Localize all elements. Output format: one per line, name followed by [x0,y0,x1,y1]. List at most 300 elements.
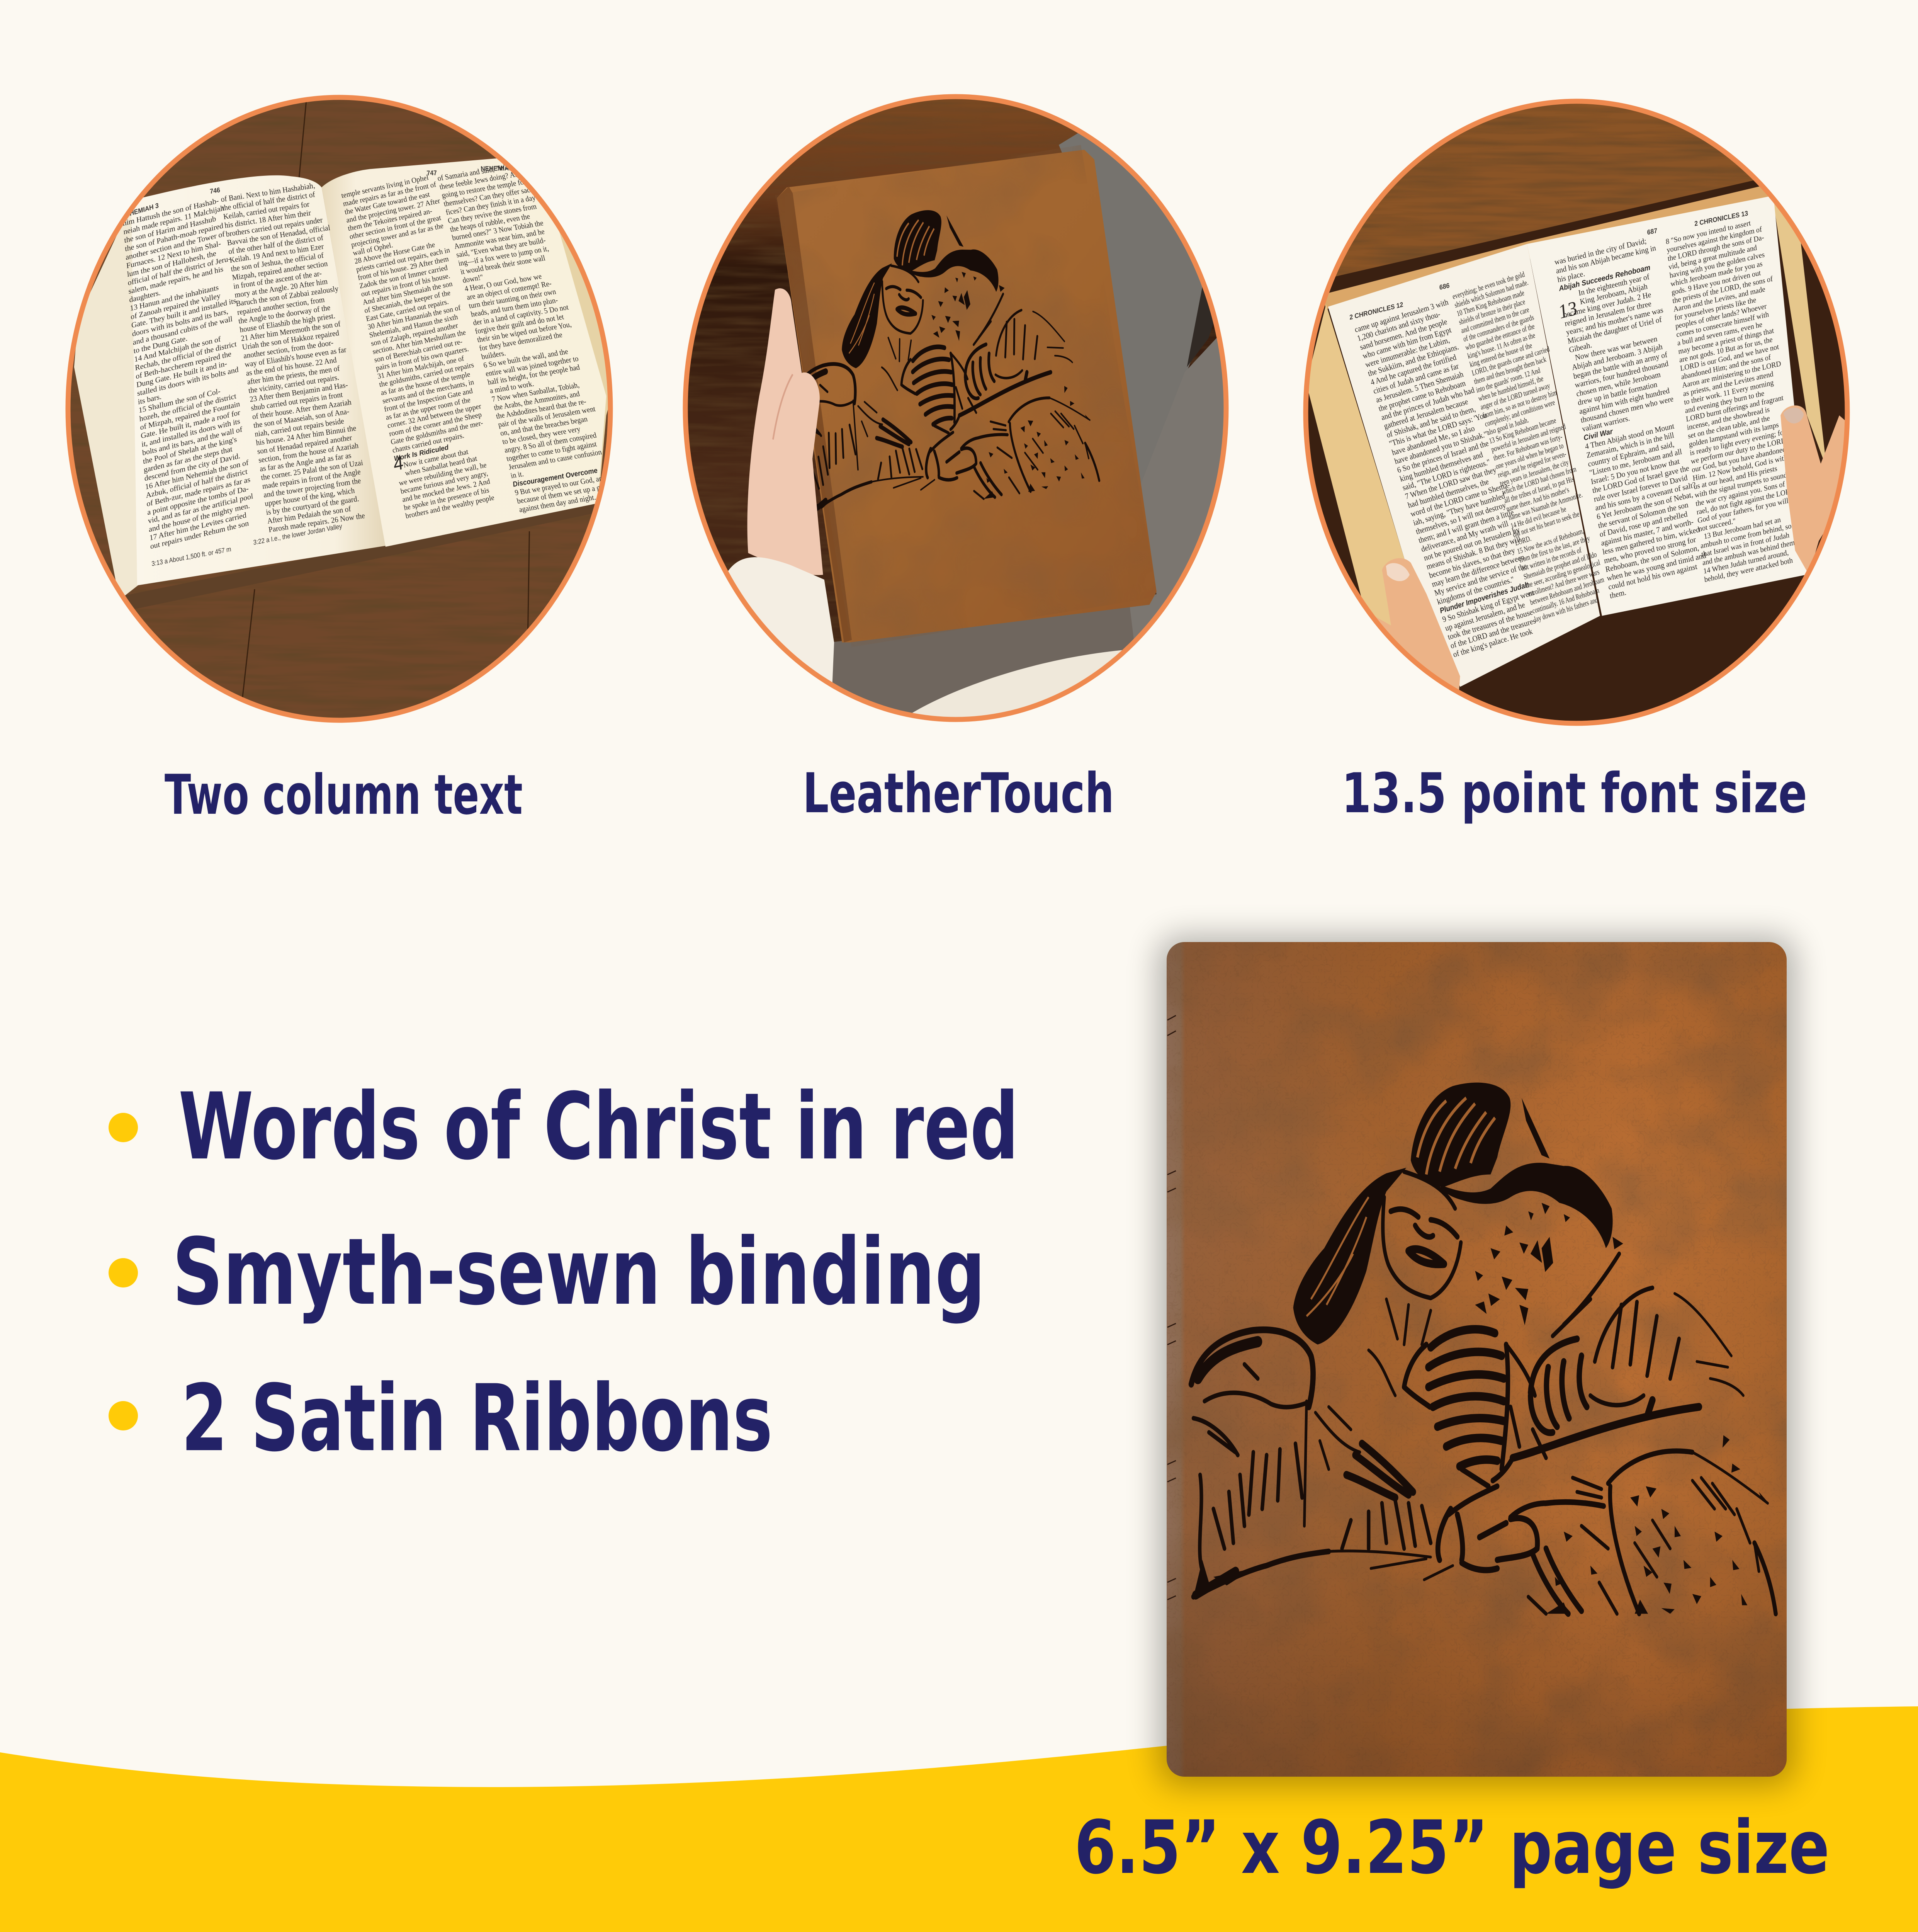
hands holding open bible: King Jeroboam, Abijah [1579,282,1648,306]
hands holding open bible [1298,92,1858,734]
open bible on wood table: section. After him Meshullam the [372,328,467,356]
hands holding open bible: reign, and he reigned for seven- [1497,449,1567,480]
hands holding open bible: Aaron are ministering to the LORD [1682,359,1782,390]
open bible on wood table: the heaps of rubble, even the [449,212,531,234]
hands holding open bible: 6 So the princes of Israel and the [1396,439,1490,475]
open bible on wood table: and the tower projecting from the [263,477,362,500]
hands holding open bible: "Listen to me, Jeroboam and all [1589,447,1683,478]
hands holding open bible: 686 [1439,282,1450,291]
open bible on wood table: 14 And Malchijah the son of [134,335,221,364]
hands holding open bible: king humbled themselves and [1399,450,1484,484]
open bible on wood table: his district. 18 After him their [224,209,312,230]
hands holding open bible: and evening they burn to the [1685,389,1765,415]
open bible on wood table: his house. 24 After him Binnui the [255,424,357,447]
open bible on wood table: on, and that the breaches began [499,415,589,438]
hands holding open bible: LORD, the guards came and carried [1471,344,1551,378]
open bible on wood table: Uriah the son of Hakkoz repaired [242,329,340,352]
hands holding open bible: the seer, according to genealogical [1525,558,1601,590]
open bible on wood table: forgive their guilt and do not let [474,313,565,336]
hands holding open bible: the LORD through the sons of Da- [1667,233,1765,263]
open bible on wood table: corner. 32 And between the upper [387,402,482,430]
open bible on wood table: repaired another section, from [237,296,325,317]
open bible on wood table: it, and installed its doors with its [141,417,241,449]
hands holding open bible: Rehoboam, the son of Solomon, [1605,544,1700,574]
open bible on wood table: a mind to work. [489,380,535,395]
bullet text 3: 2 Satin Ribbons [181,1365,773,1472]
hands holding open bible: 8 "So now you intend to assert [1665,219,1752,246]
open bible on wood table: pair of the walls of Jerusalem went [497,405,596,429]
open bible on wood table: 4 Hear, O our God, how we [464,272,542,293]
open bible on wood table: daughters. [129,288,161,304]
hands holding open bible: everything; he even took the gold [1451,270,1526,301]
open bible on wood table: Ammonite was near him, and he [453,228,545,251]
open bible on wood table: niah, carried out repairs beside [254,417,345,439]
open bible on wood table: the son of Harim and Hasshub [124,214,216,245]
open bible on wood table: Parosh made repairs. 26 Now the [268,512,365,534]
open bible on wood table: Keilah, carried out repairs for [223,200,310,221]
open bible on wood table: to be closed, they were very [501,425,581,446]
hands holding open bible: the war cry against you. Sons of Is- [1695,478,1794,508]
bullet dot 3 [109,1401,138,1430]
open bible on wood table: the Water Gate toward the east [344,190,431,216]
open bible on wood table: 17 After him the Levites carried [149,511,247,543]
open bible on wood table: shub carried out repairs in front [250,391,343,413]
open bible on wood table: 21 After him Meremoth the son of [240,320,341,343]
open bible on wood table: the son of Jeshua, the official of [230,251,324,274]
open bible on wood table: And after him Shemaiah the son [362,280,454,307]
open bible on wood table: them the Tekoites repaired an- [347,207,433,233]
open bible on wood table: 15 Shallum the son of Col- [138,387,221,415]
hands holding open bible: began the battle with an army of [1573,350,1668,381]
open bible on wood table: and he mocked the Jews. 2 And [401,477,491,504]
open bible on wood table: the son of Maaseiah, son of Ana- [253,407,350,430]
hands holding open bible: shields which Solomon had made. [1454,277,1529,310]
hands holding open bible: country of Ephraim, and said, [1587,440,1675,469]
open bible on wood table: der in a land of captivity. 5 Do not [472,303,570,327]
hands holding open bible: Now there was war between [1574,334,1658,362]
hands holding open bible: them and then brought them back [1473,354,1547,386]
hands holding open bible: completely; and conditions were [1484,398,1556,429]
photo circle: leathertouch [680,92,1240,730]
open bible on wood table: as the end of his house. 22 And [245,356,337,378]
open bible on wood table: entire wall was joined together to [485,354,579,378]
hands holding open bible: word of the LORD came to Shema- [1409,480,1511,519]
hands holding open bible: of the LORD and the treasures [1449,616,1537,650]
hands holding open bible: Israel: 5 Do you not know that [1590,457,1680,486]
hands holding open bible: 13 But Jeroboam had set an [1703,515,1781,541]
open bible on wood table: After him Pedaiah the son of [267,505,352,526]
orange ring [685,97,1226,719]
hands holding open bible: against him with eight hundred [1578,386,1670,416]
open bible on wood table: in front of the ascent of the ar- [233,269,322,291]
open bible on wood table: salem, made repairs, he and his [128,265,224,296]
hands holding open bible: name there. And his mother's [1505,485,1570,513]
hands holding open bible: have abandoned you to Shishak.'" [1393,429,1490,466]
leather cover [1167,942,1787,1777]
open bible on wood table: 7 Now when Sanballat, Tobiah, [491,381,580,404]
open bible on wood table: way of Eliashib's house even as far [244,345,347,369]
open bible on wood table: descend from the city of David. [144,452,241,483]
hands holding open bible: means of Shishak. 8 But they will [1425,534,1522,571]
yellow wave footer band [0,1706,1918,1932]
hands holding open bible: valiant warriors. [1582,414,1631,434]
open bible on wood table: 746 [210,186,220,195]
hands holding open bible: anger of the LORD turned away [1480,381,1551,412]
open bible on wood table: 747 [426,169,437,177]
open bible on wood table: son of Berechiah carried out re- [374,338,463,364]
open bible on wood table: Zadok the son of Immer carried [359,264,448,290]
hands holding open bible: and committed them to the care [1460,305,1530,335]
open bible on wood table: half its height, for the people had [487,363,581,387]
open bible on wood table: 13 Hanun and the inhabitants [130,283,219,313]
open bible on wood table: for they have demoralized the [478,331,563,353]
hands holding open bible: are not gods. 10 But as for us, the [1679,335,1773,364]
hands holding open bible: shields of bronze in their place [1458,297,1526,327]
open bible on wood table: turn their taunting on their own [468,287,557,310]
hands holding open bible: may learn the difference between [1430,553,1526,589]
open bible on wood table: when Sanballat heard that [404,454,478,478]
hands holding open bible: 4 Then Abijah stood on Mount [1584,422,1675,451]
open bible on wood table: upper house of the king, which [264,486,355,508]
open bible on wood table: burned ones?" 3 Now Tobiah the [451,219,544,242]
hands holding open bible: our God, but you have abandoned [1691,445,1786,474]
hands holding open bible: with the signal trumpets to sound [1694,471,1788,500]
open bible on wood table: 31 After him Malchijah, one of [377,354,465,381]
open bible on wood table: servants and of the merchants, in [382,378,475,405]
hands holding open bible: did not set his heart to seek the [1512,509,1580,539]
open bible on wood table: Jerusalem and to cause confusion [508,448,603,472]
hands holding open bible: up against Jerusalem, and he [1444,600,1526,633]
hands holding open bible: incense, and the showbread is [1687,405,1770,432]
open bible on wood table: as far as the Angle and as far as [259,451,352,473]
hands holding open bible: 1,200 chariots and sixty thou- [1356,310,1441,343]
open bible on wood table: fices? Can they finish it in a day? [445,193,540,217]
open bible on wood table: lum the son of Hallohesh, the [127,249,217,279]
hands holding open bible: them. [1609,588,1627,600]
hands holding open bible: My service and the service of the [1433,561,1528,598]
hands holding open bible: set on the clean table, and the [1687,414,1770,440]
hands holding open bible: Plunder Impoverishes Judah [1439,580,1530,615]
hands holding open bible: gathered at Jerusalem because [1383,397,1469,431]
open bible on wood table: Shelemiah, and Hanun the sixth [369,313,459,340]
hands holding open bible: continually. 16 And Rehoboam [1531,585,1600,615]
open bible on wood table: against them day and night. [518,493,597,514]
open bible on wood table: house of Eliashib the high priest. [239,312,336,334]
hands holding open bible: years; and his mother's name was [1565,306,1664,337]
engraved family portrait [1191,1083,1776,1614]
open bible on wood table: Dung Gate. He built it and in- [136,359,228,389]
hands holding open bible: and the ambush was behind them. [1702,538,1797,567]
open bible on wood table: angry. 8 So all of them conspired [503,431,598,455]
open bible on wood table: of Zanoah repaired the Valley [130,291,221,321]
hands holding open bible: of Shishak, and he said to them, [1385,405,1476,440]
hands holding open bible: king's house. 11 As often as the [1466,330,1536,361]
open bible on wood table: vid, and as far as the artificial pool [148,492,253,526]
hands holding open bible: 2 CHRONICLES 12 [1349,301,1403,321]
open bible on wood table: other section in front of the great [349,214,442,241]
hands holding open bible: we perform our duty to the LORD [1690,436,1787,466]
open bible on wood table: of Beth-zur, made repairs as far as [146,475,251,509]
hands holding open bible: one years old when he began to [1495,441,1565,471]
open bible on wood table: wall of Ophel. [352,241,394,257]
orange ring [68,97,610,720]
open bible on wood table: after him the priests, the men of [247,364,340,386]
open bible on wood table: Gate. He built it, made a roof for [141,408,241,440]
hands holding open bible: of David, rose up and rebelled [1599,510,1688,539]
open bible on wood table: Furnaces. 12 Next to him Shal- [126,239,221,270]
open bible on wood table: Rechab, the official of the district [135,340,237,372]
hands holding open bible: God of your fathers, for you will [1697,497,1789,525]
open bible on wood table: 23 After them Benjamin and Has- [249,381,348,404]
open bible on wood table: down!" [462,273,484,285]
hands holding open bible: from him, so as not to destroy him [1481,388,1558,420]
hands holding open bible: the prophet came to Rehoboam [1378,379,1467,413]
open bible on wood table: Bavvai the son of Henadad, official [227,224,331,247]
open bible on wood table: Baruch the son of Zabbai zealously [235,285,339,308]
open bible on wood table: official of half the district of Jeru- [127,254,231,287]
hands holding open bible: 13 So King Rehoboam became [1488,416,1557,446]
hands holding open bible: the LORD God of Israel gave the [1592,464,1690,495]
hands holding open bible: 2 CHRONICLES 13 [1694,209,1748,228]
caption: two column text: Two column text [165,763,523,827]
hands holding open bible: against his master, 7 and worth- [1600,517,1694,548]
hands holding open bible: lay down with his fathers and [1533,595,1599,624]
hands holding open bible: which Jeroboam made for you as [1670,260,1763,288]
hands holding open bible: is ready to light every evening; for [1689,428,1787,457]
open bible on wood table: builders. [481,349,506,361]
hands holding open bible: between Rehoboam and Jeroboam [1529,575,1605,607]
hands holding open bible: us at our head, and His priests [1693,464,1778,491]
open bible on wood table: NEHEMIAH 3 [121,201,159,220]
hands holding open bible: became king over Judah. 2 He [1563,290,1652,320]
open bible on wood table: pairs in front of his own quarters. [375,345,469,372]
hands holding open bible: and the princes of Judah who had [1380,386,1476,422]
hands holding open bible: 14 When Judah turned around, [1703,548,1789,576]
hands holding open bible: sand horsemen. And the people [1359,317,1448,352]
hands holding open bible: rael, do not fight against the LORD [1696,486,1796,517]
hands holding open bible: not succeed." [1698,517,1736,534]
bullet dot 2 [109,1258,138,1287]
hands holding open bible: took the treasures of the house [1447,608,1534,642]
hands holding open bible: 14 He did evil because he [1510,504,1567,530]
open bible on wood table: 28 Above the Horse Gate the [354,241,436,266]
hands holding open bible: "This is what the LORD says: 'You [1388,411,1488,449]
open bible on wood table: Now it came about that [403,447,469,469]
hands holding open bible: was buried in the city of David; [1554,236,1647,267]
open bible on wood table: heads, and turn them into plun- [470,296,559,319]
open bible on wood table: a point opposite the tombs of Da- [147,484,249,517]
hands holding open bible: have abandoned Me, so I also [1391,424,1476,457]
hands holding open bible: Aaron and the Levites, and made [1673,285,1766,314]
hands holding open bible: golden lampstand with its lamps [1689,421,1779,449]
open bible on wood table: made repairs as far as the front of [342,180,437,208]
hands holding open bible: and his son Abijah became king in [1555,243,1656,276]
hand holding engraved leather book [680,92,1240,730]
open bible on wood table: out repairs in front of his house. [360,272,451,299]
hands holding open bible: had humbled themselves, the [1407,477,1490,510]
open bible on wood table: mory at the Angle. 20 After him [234,277,328,299]
open bible on wood table: he spoke in the presence of his [403,486,490,512]
open bible on wood table: 16 After him Nehemiah the son of [145,458,249,492]
open bible on wood table: Work Is Ridiculed [393,443,450,463]
hands holding open bible: when he humbled himself, the [1477,374,1544,403]
hands holding open bible: which the LORD had chosen from [1501,464,1577,497]
hands holding open bible: of the king's palace. He took [1452,627,1534,659]
large engraved leather bible [1159,937,1794,1785]
hands holding open bible: came up against Jerusalem 3 with [1354,298,1449,334]
hands holding open bible: LORD. [1514,534,1532,547]
hands holding open bible: 10 Then King Rehoboam made [1456,288,1525,318]
bullet text 1: Words of Christ in red [178,1073,1019,1180]
bullet text 2: Smyth-sewn binding [172,1219,985,1326]
hands holding open bible: men, who proved too strong for [1603,535,1697,565]
hands holding open bible: the priests of the LORD, the sons of [1672,275,1774,305]
open bible on wood table: 3:13 a About 1,500 ft. or 457 m [151,546,231,568]
hands holding open bible: for yourselves priests like the [1674,296,1757,322]
open bible on wood table: made repairs in front of the Angle [262,468,361,491]
open bible on wood table: temple servants living in Ophel [341,173,429,200]
hands holding open bible: Him. 12 Now behold, God is with [1692,453,1788,483]
open bible on wood table: 9 But we prayed to our God, and [514,474,607,497]
hands holding open bible: 13 [1558,296,1578,323]
hands holding open bible: the Sukkiim, and the Ethiopians. [1367,342,1460,378]
hands holding open bible: his place. [1557,269,1585,284]
hands holding open bible: as Jerusalem. 5 Then Shemaiah [1375,370,1464,405]
hands holding open bible: Shemaiah the prophet and of Iddo [1522,549,1598,581]
hands holding open bible: who guarded the entrance of the [1464,321,1536,352]
book shadow [1159,937,1794,1785]
hands holding open bible: 4 And he captured the fortified [1369,353,1458,387]
hands holding open bible: name was Naamah the Ammonite. [1507,490,1583,522]
open bible on wood table: bolts and its bars, and the wall of [142,425,243,457]
hands holding open bible: abandoned Him; and the sons of [1681,353,1772,381]
open bible on wood table: as far as the house of the temple [380,370,471,397]
hands holding open bible: enrollment? And there were wars [1527,567,1600,598]
open bible on wood table: Keilah. 19 And next to him Ezer [229,242,324,265]
hands holding open bible: as priests, and the Levites attend [1683,370,1774,398]
hands holding open bible: them; and I will grant them a little [1417,508,1515,545]
open bible on wood table: priests carried out repairs, each in [355,246,451,274]
hands holding open bible: Zemaraim, which is in the hill [1586,431,1675,460]
hands holding open bible: rule over Israel forever to David [1593,473,1688,504]
hands holding open bible: not written in the records of [1520,545,1582,573]
hands holding open bible: yourselves against the kingdom of [1666,225,1763,255]
open bible on wood table: its bars. [138,392,162,406]
open bible on wood table: another section, from the door- [243,338,334,361]
open bible on wood table: and a thousand cubits of the wall [133,315,233,347]
open bible on wood table: stalled its doors with its bolts and [137,365,239,398]
open bible on wood table: themselves? Can they offer sacri- [443,185,537,208]
hands holding open bible: Abijah and Jeroboam. 3 Abijah [1571,342,1663,372]
hands holding open bible: to their work. 11 Every morning [1684,378,1774,407]
hands holding open bible: Civil War [1583,427,1614,442]
open bible on wood table: going to restore the temple for [441,177,527,200]
open bible on wood table: Mizpah, repaired another section [232,260,328,282]
hands holding open bible: that Israel was in front of Judah [1701,531,1790,559]
open bible on wood table: son of Henadad repaired another [257,434,353,456]
open bible on wood table: East Gate, carried out repairs. [365,298,449,323]
open bible on wood table: because of them we set up a guard [516,481,613,506]
open bible on wood table: room of the corner and the Sheep [388,410,482,438]
open bible on wood table: doors with its bolts and its bars, [132,307,229,338]
hands holding open bible: comes to consecrate himself with [1676,310,1770,339]
open bible on wood table: 6 So we built the wall, and the [482,347,569,370]
open bible on wood table: is by the courtyard of the guard. [265,495,360,517]
hands holding open bible: powerful in Jerusalem and reigned [1490,422,1566,454]
hands holding open bible: the servant of Solomon the son [1597,500,1689,530]
open bible on wood table: hozeh, the official of the district [139,392,237,423]
hands holding open bible: who came with him from Egypt [1361,325,1453,361]
open bible on wood table: the Ashdodites heard that the re- [495,398,587,421]
open bible on wood table: as far as the upper room of the [385,396,471,422]
hands holding open bible: having with you the golden calves [1669,250,1765,280]
hands holding open bible: 7 When the LORD saw that they [1404,465,1497,501]
hands holding open bible: Gibeah. [1568,340,1593,355]
open bible on wood table: became furious and very angry, [400,469,489,496]
open bible on wood table: in it. [510,470,525,480]
open bible on wood table: their sin be wiped out before You, [476,320,573,344]
hands holding open bible: reigned in Jerusalem for three [1564,299,1652,328]
open bible on wood table: him Hattush the son of Hashab- [122,196,219,228]
open bible on wood table: the official of half the district of [222,190,316,213]
open bible on wood table: these feeble Jews doing? Are they [438,167,535,191]
open bible on wood table: of the other half of the district of [228,234,324,256]
open bible on wood table: of Mizpah, repaired the Fountain [140,400,240,432]
open bible on wood table: and the house of the mighty men. [148,501,250,534]
hands holding open bible: gods. 9 Have you not driven out [1671,269,1762,297]
open bible on wood table: front of the Inspection Gate and [383,387,474,413]
hands holding open bible: all the tribes of Israel, to put His [1503,474,1575,505]
hands holding open bible: ambush to come from behind, so [1700,522,1792,550]
open bible on wood table: son of Zalaph, repaired another [370,321,459,348]
hands holding open bible: 6 Yet Jeroboam the son of Nebat, [1596,490,1694,521]
hands holding open bible: king entered the house of the [1469,341,1533,369]
open bible on wood table: Discouragement Overcome [512,466,598,488]
open bible on wood table: Can they revive the stones from [447,202,537,225]
hands holding open bible: themselves, so I will not destroy [1415,501,1507,536]
open bible on wood table: neiah made repairs. 11 Malchijah [123,204,224,236]
open bible on wood table: the vicinity, carried out repairs. [248,373,340,395]
open bible on wood table [62,92,618,730]
hands holding open bible: deliverance, and My wrath will [1420,519,1510,554]
hands holding open bible: iah, saying, "They have humbled [1412,492,1506,527]
open bible on wood table: another section and the Tower of [125,230,225,262]
hands holding open bible: teen years in Jerusalem, the city [1499,457,1570,488]
hands holding open bible: of the commanders of the guards [1462,313,1535,344]
hands holding open bible: cities of Judah and came as far [1372,362,1460,396]
open bible on wood table: Gate the goldsmiths and the mer- [390,419,484,446]
hands holding open bible: In the eighteenth year of [1578,272,1650,298]
photo circle: two column text [62,92,618,730]
open bible on wood table: chants carried out repairs. [392,431,465,455]
hands holding open bible: 15 Now the acts of Rehoboam, [1516,526,1585,556]
bullet dot 1 [109,1113,138,1142]
open bible on wood table: the goldsmiths, carried out repairs [379,361,475,389]
open bible on wood table: and the projecting tower. 27 After [345,197,441,224]
hands holding open bible: LORD burnt offerings and fragrant [1685,393,1784,423]
open bible on wood table: section, from the house of Azariah [258,442,359,465]
open bible on wood table: 4 [392,452,404,475]
hands holding open bible: could not hold his own against [1608,562,1698,592]
hands holding open bible: kingdoms of the countries." [1436,575,1515,607]
open bible on wood table: said, "Even what they are build- [455,236,547,259]
open bible on wood table: front of his house. 29 After them [357,255,450,282]
photo circle: font size [1298,92,1858,734]
hands holding open bible: 687 [1647,227,1658,236]
open bible on wood table: the son of Pahath-moab repaired [124,221,224,253]
open bible on wood table: to the Dung Gate. [133,334,188,355]
open bible on wood table: Gate. They built it and installed its [131,296,236,330]
